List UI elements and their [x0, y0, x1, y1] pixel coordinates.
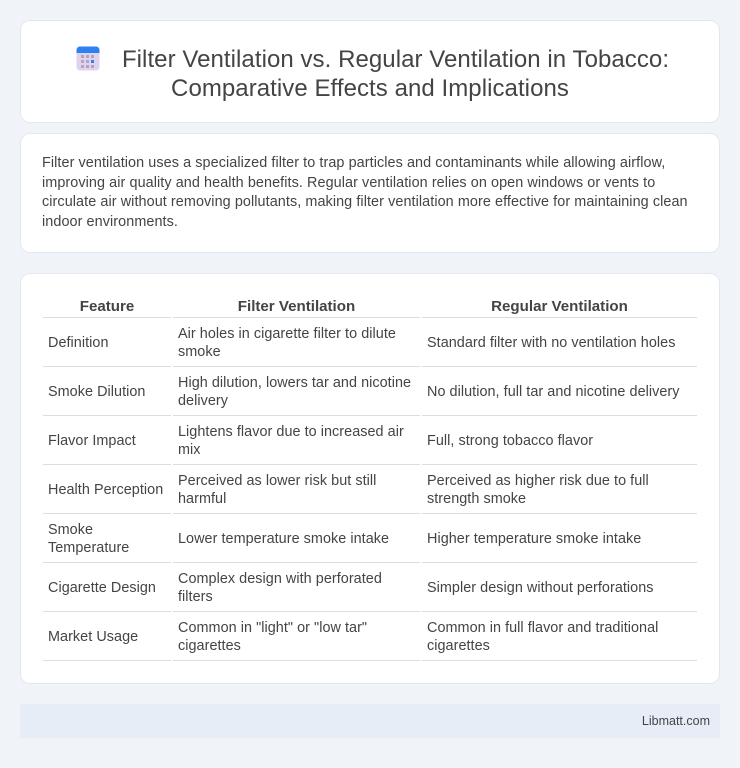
row: Health Perception [43, 473, 697, 514]
table header: Filter Ventilation [238, 298, 355, 315]
row: Market Usage: Common in "light" or "low tar" [178, 620, 367, 636]
row: Market Usage: Market Usage [48, 629, 138, 645]
row: Flavor Impact [43, 424, 697, 465]
title [122, 46, 669, 102]
row: Definition: Standard filter with no ventilation holes [427, 335, 675, 351]
row: Smoke Dilution [43, 375, 697, 416]
row: Market Usage: cigarettes [178, 638, 241, 654]
text block: intro [42, 155, 688, 230]
text block: intro: Filter ventilation uses a specialized filter to trap particles and contaminants while allowing airflow, [42, 155, 665, 171]
row: Smoke Temperature: Lower temperature smoke intake [178, 531, 389, 547]
panel: intro text [20, 133, 720, 253]
row: Health Perception: strength smoke [427, 491, 526, 507]
row: Definition [43, 326, 697, 367]
footer bar [20, 704, 720, 738]
row: Cigarette Design: filters [178, 589, 213, 605]
text block: intro: circulate air without removing pollutants, making filter ventilation more effective for maintaining clean [42, 194, 688, 210]
row: Smoke Temperature [43, 522, 697, 563]
footer text: Libmatt.com [642, 714, 710, 728]
row: Market Usage: cigarettes [427, 638, 490, 654]
row: Smoke Temperature: Smoke [48, 522, 93, 538]
panel: comparison table [20, 273, 720, 684]
icon: calendar [76, 46, 100, 70]
panel: title card [20, 20, 720, 123]
row: Cigarette Design [43, 571, 697, 612]
row: Smoke Dilution: Smoke Dilution [48, 384, 145, 400]
row: Health Perception: harmful [178, 491, 226, 507]
row: Health Perception: Perceived as higher risk due to full [427, 473, 649, 489]
table header: Feature [80, 298, 134, 315]
row: Smoke Dilution: High dilution, lowers tar and nicotine [178, 375, 411, 391]
row: Definition: Definition [48, 335, 108, 351]
row: Health Perception: Health Perception [48, 482, 163, 498]
text block: intro: indoor environments. [42, 214, 178, 230]
row: Cigarette Design: Complex design with perforated [178, 571, 382, 587]
row: Smoke Dilution: No dilution, full tar and nicotine delivery [427, 384, 680, 400]
row: Smoke Dilution: delivery [178, 393, 228, 409]
title: Filter Ventilation vs. Regular Ventilation in Tobacco: [122, 46, 669, 73]
row: Cigarette Design: Cigarette Design [48, 580, 156, 596]
row: Market Usage [43, 620, 697, 661]
title: Comparative Effects and Implications [171, 75, 569, 102]
row: Flavor Impact: Full, strong tobacco flavor [427, 433, 593, 449]
row: Definition: smoke [178, 344, 221, 360]
row: Definition: Air holes in cigarette filter to dilute [178, 326, 396, 342]
row: Flavor Impact: mix [178, 442, 201, 458]
table header [43, 298, 697, 318]
row: Cigarette Design: Simpler design without perforations [427, 580, 654, 596]
row: Health Perception: Perceived as lower risk but still [178, 473, 376, 489]
text block: intro: improving air quality and health benefits. Regular ventilation relies on open windows or vents to [42, 175, 655, 191]
row: Smoke Temperature: Temperature [48, 540, 129, 556]
table header: Regular Ventilation [491, 298, 628, 315]
row: Flavor Impact: Flavor Impact [48, 433, 136, 449]
row: Flavor Impact: Lightens flavor due to increased air [178, 424, 404, 440]
row: Market Usage: Common in full flavor and traditional [427, 620, 658, 636]
row: Smoke Temperature: Higher temperature smoke intake [427, 531, 641, 547]
